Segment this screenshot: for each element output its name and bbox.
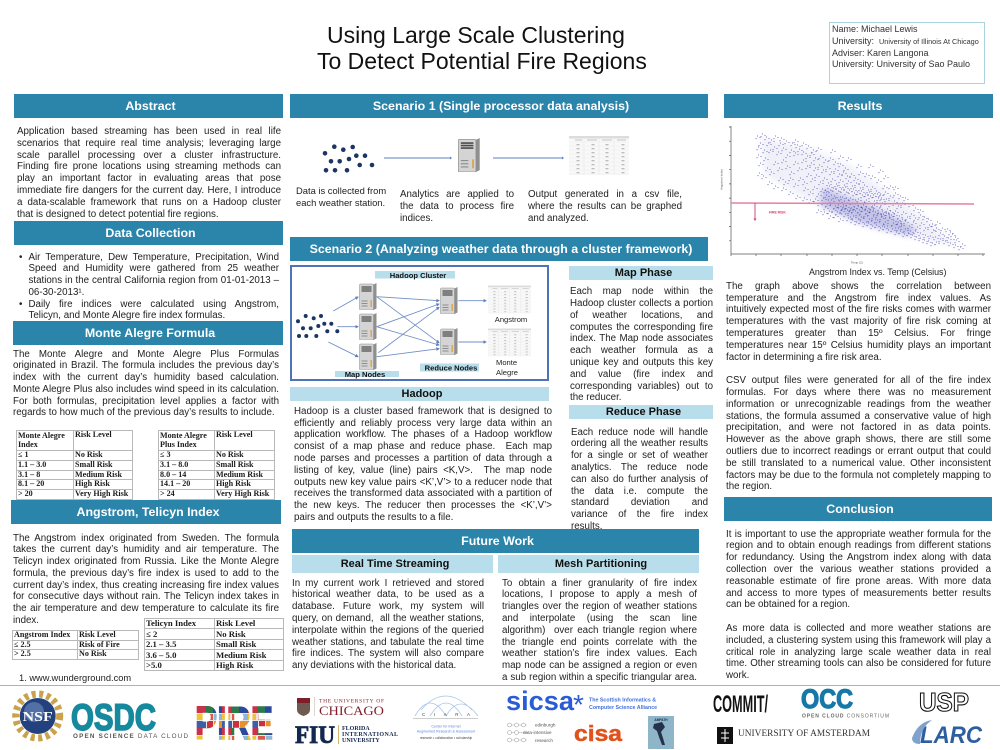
logo: Open Cloud Consortium: OPEN CLOUD CONSORTIUM	[802, 714, 889, 720]
heading: data collection: Data Collection	[105, 226, 196, 240]
subheading: map phase: Map Phase	[615, 266, 672, 278]
text: results: outliers due to incorrect readings or errant output that could	[726, 446, 991, 457]
text: data collection bullets: 06-30-2013¹.	[28, 287, 84, 298]
text: results: information or unrecognizable readings from the weather	[726, 399, 991, 410]
text: hadoop: efficiently and reliably process very large data within an	[294, 418, 552, 429]
text: map phase: of weather locations, and	[570, 310, 713, 321]
logo: USP: USP	[919, 687, 969, 717]
logo: Open Science Data Cloud: OPEN SCIENCE DATA CLOUD	[73, 733, 188, 740]
text: mesh partitioning: the triangle end points correlate with the	[502, 637, 697, 648]
title: To Detect Potential Fire Regions	[317, 48, 647, 74]
icons: reduce node servers	[440, 287, 458, 355]
logo: LARC: LARC	[920, 722, 983, 749]
logo: University of Chicago: THE UNIVERSITY OF	[319, 698, 384, 704]
caption: chart: Angstrom Index vs. Temp (Celsius)	[809, 267, 946, 277]
text: results: However as the above graph shows, there are still some	[726, 434, 991, 445]
heading: scenario 1: Scenario 1 (Single processor data analysis)	[373, 99, 629, 113]
text: angstrom telicyn: current day’s index, thus creating increasing fire index values	[13, 580, 279, 591]
axis label: index: Angstrom Index	[720, 168, 724, 190]
logo: Florida International University: UNIVERSITY	[342, 738, 380, 744]
text: map phase	[570, 286, 714, 403]
table: telicyn index: Small Risk	[216, 639, 256, 649]
logo: NSF	[16, 694, 60, 738]
icons: output spreadsheets	[488, 286, 531, 356]
logo: SICSA: *	[573, 689, 584, 720]
text: map phase: computes the corresponding fire	[570, 322, 713, 333]
text: monte alegre	[13, 348, 279, 418]
caption: output: where the results can be graphed	[528, 201, 682, 212]
heading: scenario 1	[290, 94, 708, 118]
text: hadoop: listing of key, value (line) pairs <K,V>. The map node	[294, 465, 552, 476]
text: mesh partitioning: locations, I propose to apply a mesh of	[502, 589, 697, 600]
logo: Florida International University: INTERNATIONAL	[342, 732, 398, 738]
text: data collection bullets: Speed and Humidity were gathered from 25 weather	[28, 263, 279, 274]
subheading: map phase	[569, 266, 713, 280]
heading: future work	[292, 529, 699, 553]
text: results: formulas. For days where there was no measurement	[726, 387, 991, 398]
text: mesh partitioning: map node can be assigned a region or even	[502, 660, 697, 671]
text: map phase: unique key and outputs this key	[570, 357, 713, 368]
text: reduce phase: Each reduce node will handle	[571, 427, 708, 438]
logo: University of Amsterdam: UNIVERSITY OF AMSTERDAM	[738, 729, 870, 739]
text: reduce phase: standard deviation and	[571, 497, 708, 508]
caption: analytics: Analytics are applied to	[400, 189, 514, 200]
text: hadoop: application workflow. The phases of a Hadoop workflow	[294, 429, 552, 440]
text: results: precipitation, and were not factored in as data points.	[726, 422, 991, 433]
text: results: factors may be due to the formula not completely mapping to	[726, 470, 991, 481]
caption: analytics: indices.	[400, 213, 433, 224]
subheading: hadoop: Hadoop	[402, 388, 442, 400]
text: mesh partitioning: triangles over the region of weather stations	[502, 601, 697, 612]
logo: Edinburgh Data-Intensive Research: edinburgh	[535, 722, 556, 728]
caption: data collected: Data is collected from	[296, 185, 386, 196]
table: monte alegre index	[16, 430, 133, 500]
logo: SICSA	[506, 686, 657, 720]
text: angstrom telicyn: for consecutive days without rain. The Telicyn index takes in	[13, 591, 279, 602]
heading: angstrom telicyn index: Angstrom, Telicyn Index	[76, 505, 219, 519]
text: conclusion: time. Other streaming tools can also be considered for future	[726, 658, 991, 669]
text: data collection bullets	[19, 252, 280, 321]
text: abstract: Finding fire prone locations using streaming methods can	[17, 161, 281, 172]
logo: Open Cloud Consortium	[801, 684, 889, 720]
arrow: stations to analytics	[384, 156, 452, 160]
fire risk arrow	[754, 203, 756, 221]
text: monte alegre: The Monte Alegre and Monte Alegre Plus Formulas	[13, 348, 279, 360]
logo: CIARA: Center for Internet	[431, 724, 461, 728]
text: real time streaming: database. Future work, my system will	[292, 601, 484, 612]
text: conclusion: and access to more types of measurements better results	[726, 588, 991, 599]
text: reduce phase: can also do further analysis of	[571, 474, 708, 485]
text: mesh partitioning: a sub region within a specific triangular area.	[502, 672, 697, 683]
text: mesh partitioning: algorithm) over each triangle region where	[502, 625, 697, 636]
text: reduce phase: results.	[571, 521, 602, 532]
text: conclusion: region and to obtain enough readings from different stations	[726, 540, 991, 551]
table: telicyn index: Risk Level	[216, 618, 255, 628]
heading: scenario 2	[290, 236, 708, 260]
table: telicyn index: Telicyn Index	[146, 618, 196, 628]
caption: data collected	[296, 185, 386, 208]
scatter points	[756, 134, 966, 250]
text: abstract: scale parallel processing over a cluster infrastructure.	[17, 150, 281, 161]
label: map nodes	[335, 370, 399, 379]
logo: CIARA: Augmented Research & Assessment	[417, 730, 475, 734]
icon: server	[458, 138, 480, 172]
text: hadoop: the new keys. The reducer then processes the <K’,V’>	[294, 500, 552, 511]
text: reduce phase: ordering all the weather results	[571, 438, 708, 449]
text: data collection bullets: Air Temperature, Dew Temperature, Precipitation, Wind	[28, 252, 279, 262]
logo: CISA: cisa	[574, 721, 623, 746]
text: angstrom telicyn: formula, the previous day’s fire index is used to add to the	[13, 568, 279, 579]
heading: conclusion	[724, 497, 992, 521]
text: data collection bullets: Telicyn, and Monte Alegre fire index formulas.	[28, 310, 225, 321]
author info box: University: University of Sao Paulo	[832, 59, 970, 69]
text: real time streaming: any deviations with the historical data.	[292, 660, 456, 671]
caption: output: Output generated in a csv file,	[528, 189, 682, 200]
label: angstrom: Angstrom	[495, 315, 527, 324]
text: angstrom telicyn	[13, 532, 280, 626]
subheading: hadoop	[290, 387, 549, 401]
logo: University of Chicago	[297, 697, 384, 718]
text: mesh partitioning	[502, 578, 697, 683]
table: telicyn index: >5.0	[146, 660, 162, 670]
title	[317, 22, 647, 74]
text: data collection bullets: Daily fire indices were calculated using Angstrom,	[28, 299, 279, 310]
text: map phase: Each map node within the	[570, 286, 713, 297]
text: results: the region.	[726, 481, 772, 492]
label: map nodes: Map Nodes	[345, 370, 385, 379]
text: hadoop: node parses and processes a partition of data through a	[294, 453, 552, 464]
heading: results	[724, 94, 992, 118]
text: reduce phase	[571, 427, 708, 532]
table: monte alegre plus index: Monte Alegre	[160, 431, 207, 440]
logo: Florida International University: FIU	[295, 722, 335, 749]
logo: SICSA: sicsa	[506, 686, 575, 716]
text: monte alegre: index with the current day’s humidity based calculation.	[13, 372, 279, 383]
author info box: Adviser: Karen Langona	[832, 48, 929, 58]
text: conclusion: reasonable estimate of fire prone areas. With more data	[726, 576, 991, 587]
text: angstrom telicyn: takes the current day’s humidity and air temperature. The	[13, 544, 279, 555]
text: data collection bullets: •	[19, 252, 22, 262]
table: angstrom index	[12, 630, 139, 660]
text: angstrom telicyn: Telicyn index originated from Russia. Like the Monte Alegre	[13, 556, 279, 567]
text: results: be still translated to a numerical value. Other inconsistent	[726, 458, 991, 469]
text: hadoop	[294, 406, 552, 523]
text: reduce phase: the data i.e. compute the	[571, 486, 708, 497]
text: conclusion: As more data is collected and more weather stations are	[726, 623, 991, 634]
table: telicyn index: Medium Risk	[216, 650, 266, 660]
text: abstract: immediate fire dangers for the current day. Here, I introduce	[17, 185, 281, 196]
label: hadoop cluster: Hadoop Cluster	[390, 271, 446, 280]
axis label: temperature: Temp (C)	[851, 260, 863, 264]
fire risk threshold line	[731, 203, 974, 204]
text: mesh partitioning: and interpolate (using the scan line	[502, 613, 697, 624]
icon: weather stations dots	[323, 144, 374, 173]
text: conclusion: It is important to use the appropriate weather formula for the	[726, 529, 991, 540]
text: conclusion: critical role in analyzing large scale weather data in real	[726, 647, 991, 658]
subheading: real time streaming	[292, 555, 493, 573]
text: results: temperature and the Angstrom fire index values. As	[726, 293, 991, 304]
text: conclusion: included, a clustering system using this framework will play a	[726, 635, 991, 646]
caption: data collected: each weather station.	[296, 197, 385, 208]
heading: angstrom telicyn index	[11, 500, 281, 524]
text: conclusion: for redundancy. Using the Angstrom index along with data	[726, 552, 991, 563]
logo: AMPATH: AMPATH	[654, 718, 668, 722]
heading: monte alegre formula	[13, 321, 283, 345]
subheading: real time streaming: Real Time Streaming	[341, 558, 449, 570]
text: hadoop: consist of a map phase and reduce phase. Each map	[294, 441, 552, 452]
title: Using Large Scale Clustering	[327, 22, 625, 48]
logo: CIARA: research • collaboration • scholarship	[420, 736, 472, 740]
text: results	[726, 281, 991, 492]
text: real time streaming: In my current work I retrieved and stored	[292, 578, 484, 589]
logo: Edinburgh Data-Intensive Research	[508, 722, 556, 743]
icons: map node servers	[360, 283, 376, 370]
arrow: analytics to output	[493, 156, 564, 160]
text: reduce phase: for a single or set of weather	[571, 450, 708, 461]
table: telicyn index: 2.1 – 3.5	[146, 639, 176, 649]
logo: Open Science Data Cloud: OSDC	[71, 697, 156, 738]
logo: University of Amsterdam	[717, 727, 870, 744]
table: telicyn index: High Risk	[216, 660, 253, 670]
table: monte alegre plus index: Plus Index	[160, 440, 197, 448]
text: reduce phase: analytics. The reduce node	[571, 462, 708, 473]
text: conclusion: can be obtained for a region.	[726, 599, 850, 610]
footer logos strip	[12, 684, 983, 749]
diagram: hadoop cluster	[290, 265, 549, 381]
subheading: reduce phase	[569, 404, 713, 418]
label: monte alegre: Monte	[496, 358, 517, 367]
text: real time streaming: query, on demand, all the weather stations,	[292, 613, 484, 624]
subheading: mesh partitioning: Mesh Partitioning	[555, 558, 647, 570]
label: fire risk: FIRE RISK	[769, 210, 786, 214]
subheading: mesh partitioning	[498, 555, 699, 573]
text: angstrom telicyn: the air temperature and dew temperature to calculate its fire	[13, 603, 279, 614]
logo: PIRE: PIRE	[195, 697, 273, 749]
table: telicyn index: 3.6 – 5.0	[146, 650, 176, 660]
text: real time streaming: historical weather data, to be used as a	[292, 589, 484, 600]
heading: results: Results	[838, 99, 882, 113]
chart: angstrom index vs temperature scatter plot	[720, 126, 985, 264]
text: hadoop: receives the transformed data associated with a partition of	[294, 488, 552, 499]
logo: Florida International University: FLORIDA	[342, 726, 370, 732]
arrows: connections between nodes	[328, 297, 486, 357]
label: monte alegre: Alegre	[496, 368, 518, 377]
author info box: Name: Michael Lewis	[832, 24, 918, 34]
label: reduce nodes: Reduce Nodes	[425, 364, 477, 372]
text: real time streaming: interpolate within the regions of the queried	[292, 625, 484, 636]
author info box: University: University of Illinois At Chicago	[832, 36, 979, 46]
heading: data collection	[14, 221, 283, 245]
table: telicyn index: No Risk	[216, 629, 246, 639]
table: telicyn index: ≤ 2	[146, 629, 157, 639]
text: results: temperatures greater than 15º Celsius. For fringe	[726, 328, 991, 339]
text: abstract: play an important factor in evaluating areas that pose	[17, 173, 281, 184]
heading: future work: Future Work	[461, 534, 534, 548]
text: hadoop: Hadoop is a cluster based framework that is designed to	[294, 406, 552, 417]
logo: SICSA: Computer Science Alliance	[589, 705, 657, 711]
text: reduce phase: variance of the fire index	[571, 509, 708, 520]
logo: University of Chicago: CHICAGO	[319, 703, 384, 718]
caption: analytics: the data to process fire	[400, 201, 514, 212]
icon: weather station dots	[296, 314, 339, 338]
text: abstract: a data-scalable framework that runs on a Hadoop cluster	[17, 197, 281, 208]
text: abstract: scenarios that require real time analysis; leveraging large	[17, 138, 281, 149]
text: abstract	[17, 126, 281, 220]
table: telicyn index	[144, 618, 284, 671]
text: real time streaming: weather stations, and tabulate the real time	[292, 637, 484, 648]
text: monte alegre: originated in Brazil. The formula includes the previous day’s	[13, 360, 279, 371]
heading: monte alegre formula: Monte Alegre Formula	[85, 326, 215, 340]
logo: COMMIT: COMMIT/	[713, 691, 768, 718]
heading: abstract: Abstract	[125, 99, 176, 113]
logo: Edinburgh Data-Intensive Research: data-intensive	[523, 730, 552, 735]
text: conclusion: collection over the various weather stations provided a	[726, 564, 991, 575]
table: monte alegre index: Index	[18, 440, 38, 448]
text: map phase: and value (fire index and	[570, 369, 713, 380]
footer divider	[0, 685, 1000, 686]
text: map phase: corresponding variables) out to	[570, 381, 713, 392]
text: monte alegre: Monte Alegre Plus also includes wind speed in its calculation.	[13, 384, 279, 395]
logo: Edinburgh Data-Intensive Research: research	[535, 738, 553, 743]
heading: abstract	[14, 94, 283, 118]
heading: scenario 2: Scenario 2 (Analyzing weather data through a cluster framework)	[310, 242, 692, 256]
text: mesh partitioning: weather station’s fire index values. Each	[502, 648, 697, 659]
text: abstract: that is designed to detect potential fire regions.	[17, 209, 219, 220]
caption: analytics	[400, 189, 514, 224]
heading: conclusion: Conclusion	[826, 502, 894, 516]
text: results: factor in determining a fire risk area.	[726, 352, 882, 363]
text: hadoop: outputs new key value pairs <K’,V’> to a reducer node that	[294, 477, 552, 488]
text: results: The graph above shows the correlation between	[726, 281, 991, 292]
text: abstract: Application based streaming has been used in real life	[17, 126, 281, 137]
logo: NSF: NSF	[23, 710, 53, 725]
text: monte alegre: regards to how much of the previous day’s results to include.	[13, 407, 275, 418]
text: mesh partitioning: To obtain a finer granularity of fire index	[502, 578, 697, 589]
text: map phase: Hadoop cluster collects a portion	[570, 298, 713, 309]
logo: CIARA: C I A R A	[422, 712, 470, 717]
text: results: stations, the formula assumed a conservative value of high	[726, 411, 991, 422]
table: monte alegre plus index	[158, 430, 275, 500]
text: real time streaming	[292, 578, 484, 671]
caption: output: and analyzed.	[528, 213, 589, 224]
text: real time streaming: fire indices. The system will also compare	[292, 648, 484, 659]
text: results: temperatures with the vast majority of fire risk coming at	[726, 316, 991, 327]
table: monte alegre index: Monte Alegre	[18, 431, 65, 440]
logo: Florida International University	[295, 722, 398, 749]
caption: output	[528, 189, 682, 224]
icon: csv spreadsheet	[569, 136, 629, 175]
text: angstrom telicyn: index.	[13, 615, 39, 626]
text: data collection bullets: •	[19, 299, 22, 310]
text: hadoop: pairs and outputs the results to a file.	[294, 512, 453, 523]
logo: AMPATH	[648, 716, 674, 749]
text: results: temperatures near 15º Celsius humidity plays an important	[726, 340, 991, 351]
text: map phase: index. The Map node associates	[570, 333, 713, 344]
text: results: CSV output files were generated for all of the fire index	[726, 375, 991, 386]
text: data collection bullets: stations in the central California region from 01-01-2013 –	[28, 275, 279, 286]
subheading: reduce phase: Reduce Phase	[606, 406, 681, 418]
text: results: intuitively expected most of the fire risks comes with warmer	[726, 304, 991, 315]
logo: SICSA: The Scottish Informatics &	[589, 698, 656, 704]
text: conclusion	[726, 529, 992, 681]
author info box	[829, 22, 985, 84]
density shading	[760, 137, 958, 246]
footnote: 1. www.wunderground.com	[19, 673, 131, 683]
text: map phase: the reducer.	[570, 392, 622, 403]
logo: Open Cloud Consortium: OCC	[801, 684, 853, 714]
text: map phase: each weather formula as a	[570, 345, 713, 356]
logo: CIARA	[413, 696, 478, 740]
text: monte alegre: For both formulas, precipitation level applies a factor with	[13, 396, 279, 407]
text: conclusion: work.	[726, 670, 749, 681]
axes	[729, 126, 985, 256]
text: angstrom telicyn: The Angstrom index originated from Sweden. The formula	[13, 532, 279, 544]
